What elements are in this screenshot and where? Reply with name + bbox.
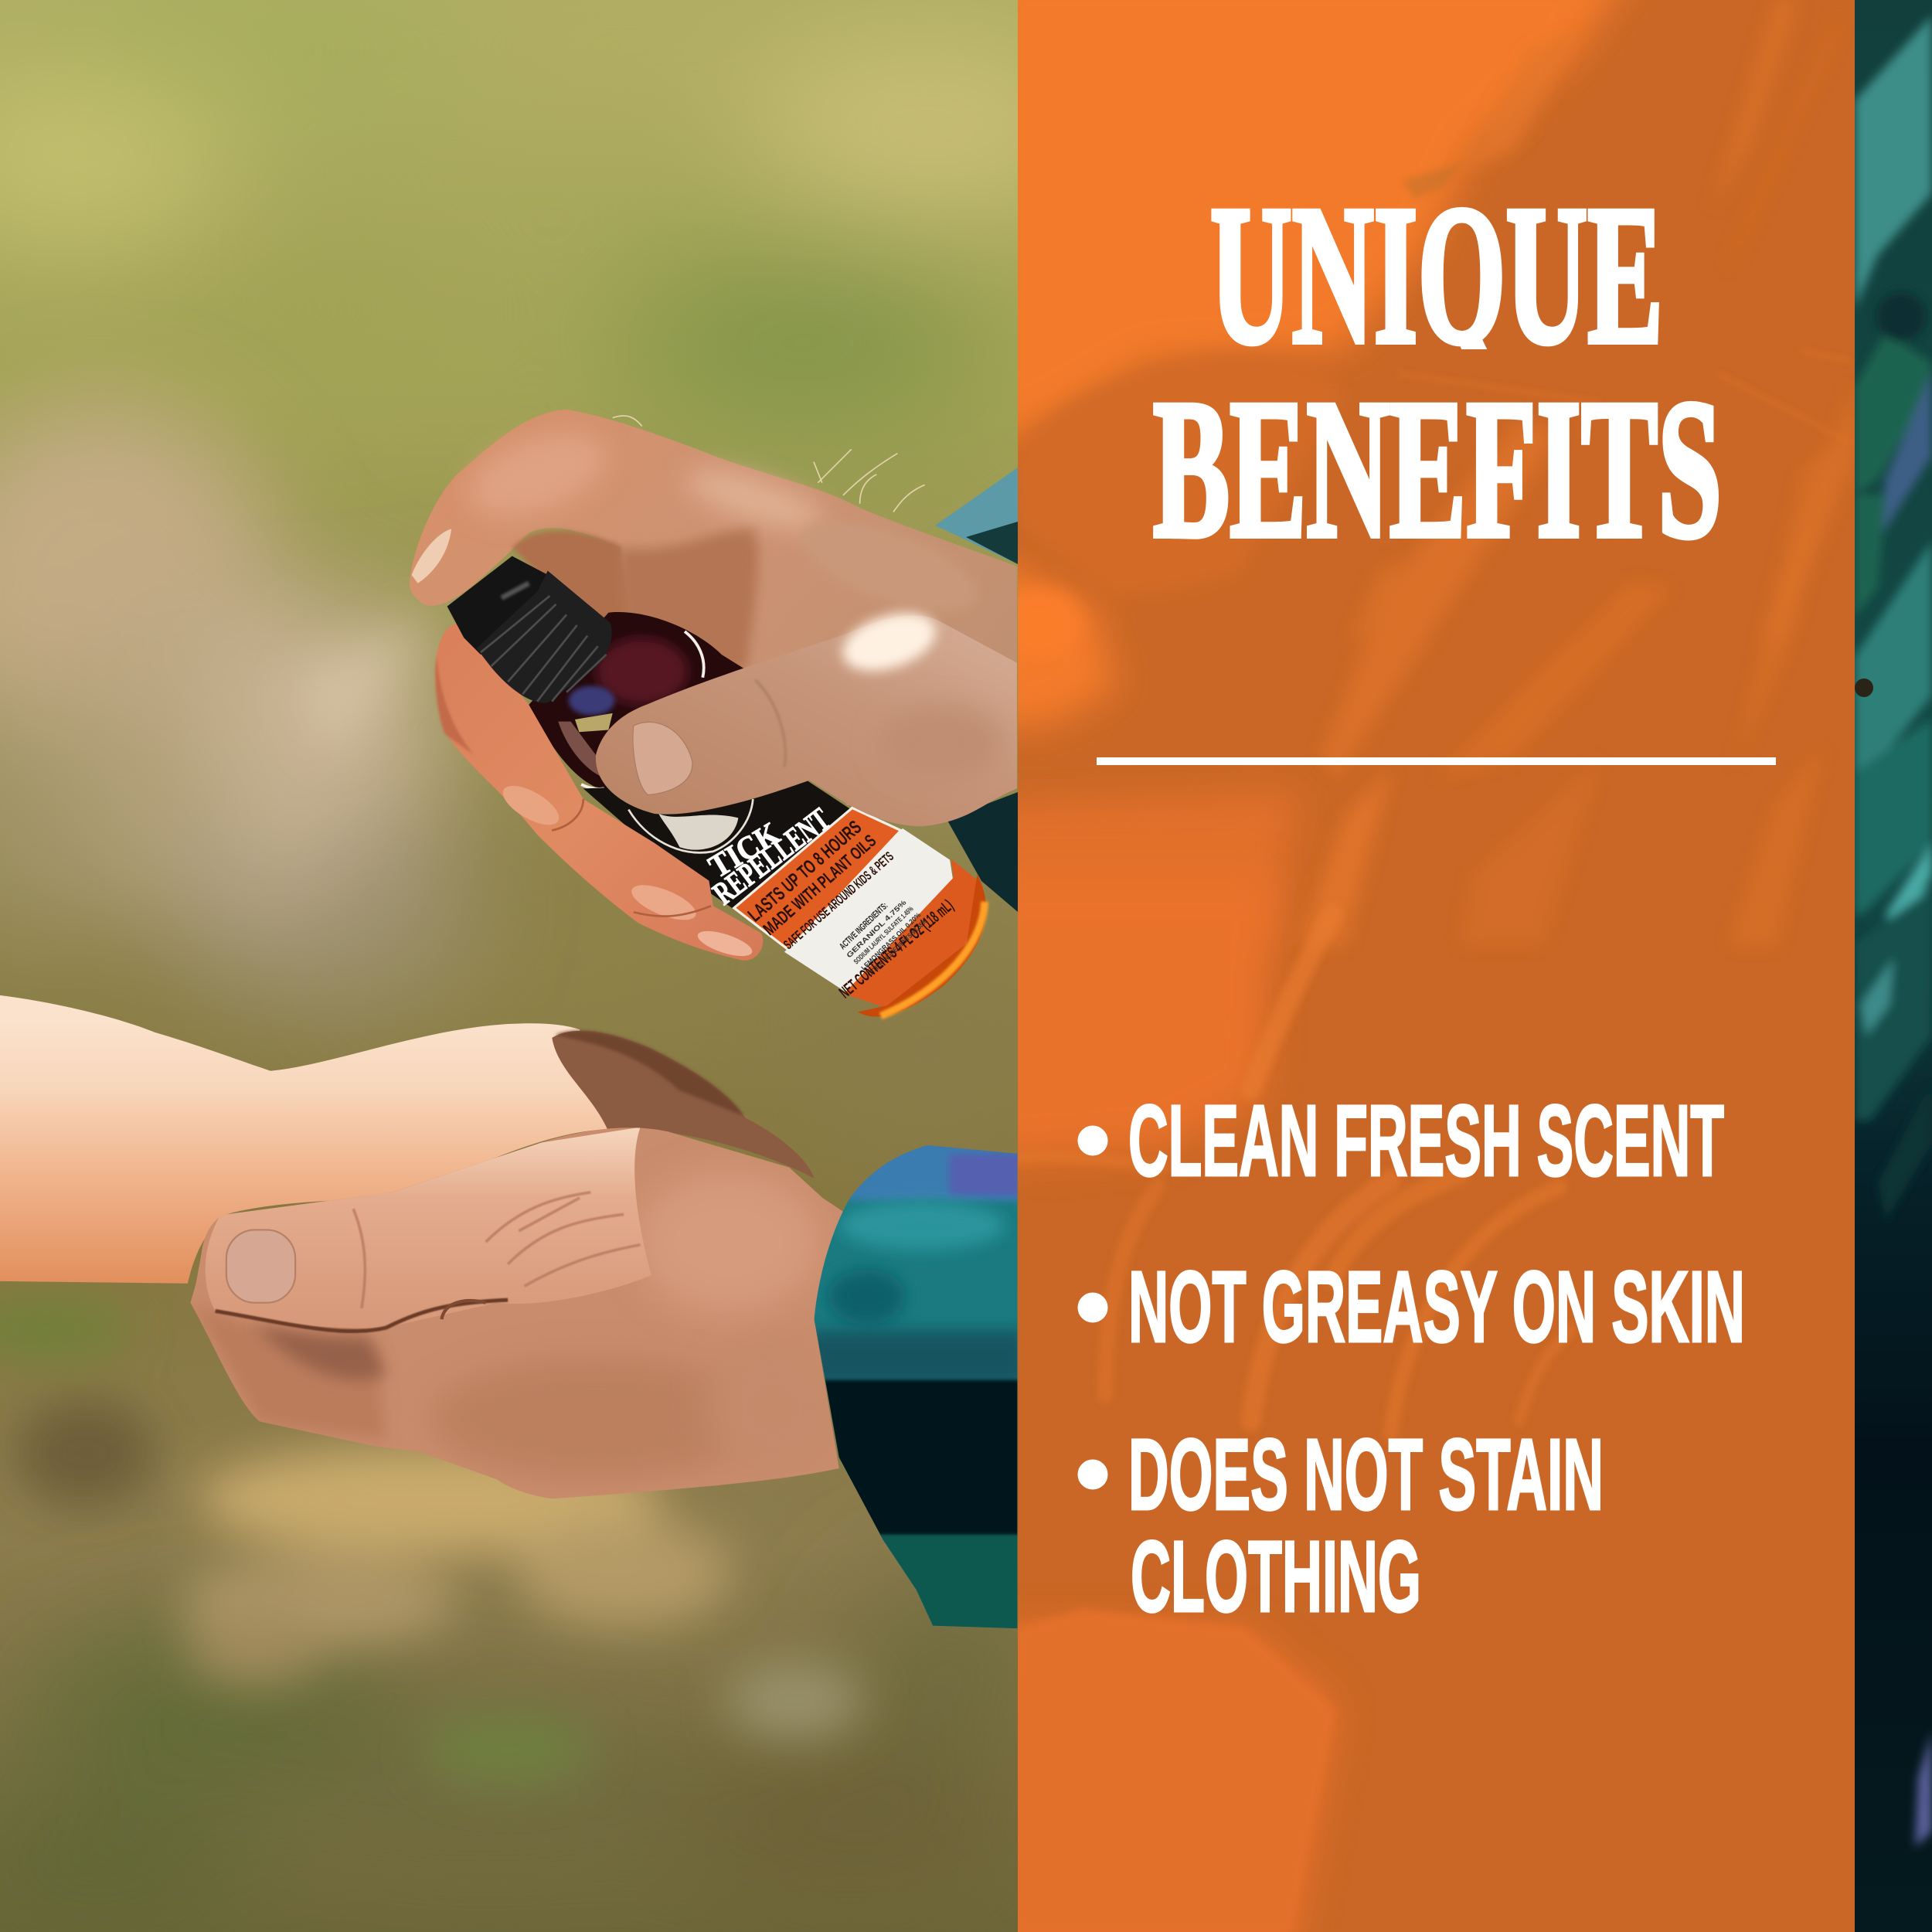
shirt folds	[1485, 56, 1541, 158]
spray mist cloud	[0, 402, 479, 1020]
fingertips	[497, 778, 565, 832]
label lower orange band	[844, 859, 978, 1007]
bullet: does not stain clothing: CLOTHING	[1131, 1519, 1421, 1633]
thumbnail	[633, 722, 692, 795]
panel: orange overlay with shirt texture	[983, 0, 1855, 1932]
bottle label	[583, 779, 986, 1017]
divider line	[1097, 757, 1776, 765]
photo: lower adult hand and child's arm	[0, 995, 1027, 1639]
spray cap	[447, 556, 612, 703]
bottle label: ACTIVE INGREDIENTS:	[837, 900, 889, 951]
amber liquid base	[858, 875, 986, 1017]
lower overlay	[983, 876, 1572, 1932]
panel: photo background	[0, 0, 1105, 1932]
lit thumb and knuckles	[206, 1128, 651, 1328]
photo: upper plaid sleeve	[935, 468, 1018, 912]
thumbnail	[226, 1230, 295, 1303]
bottle label: GERANIOL 4.75%	[845, 899, 908, 959]
index fingernail	[412, 529, 451, 583]
bottle label: NET CONTENTS 4 FL OZ (118 mL)	[835, 896, 957, 1002]
label medallion	[628, 799, 753, 852]
bottle label: LEMONGRASS OIL 0.20%	[859, 911, 922, 972]
palm and curled fingers	[435, 623, 763, 961]
bottle glass	[529, 612, 755, 791]
label text: REPELLENT	[706, 801, 837, 912]
adult hand	[188, 1128, 847, 1498]
bottle label: SAFE FOR USE AROUND KIDS & PETS	[781, 849, 896, 952]
spray jet	[294, 611, 440, 757]
label text	[702, 801, 837, 912]
photo: spray hand and bottle	[410, 410, 1017, 1017]
bottle label: MADE WITH PLANT OILS	[759, 830, 879, 939]
label white ingredients band	[784, 828, 953, 993]
bullet: does not stain clothing	[1079, 1417, 1604, 1633]
bullet: clean fresh scent	[1079, 1083, 1724, 1197]
bottle label: SODIUM LAURYL SULFATE 1.45%	[852, 905, 915, 966]
benefits list	[1079, 1083, 1745, 1633]
label black band	[583, 779, 852, 908]
thumb	[596, 602, 1017, 826]
arm hairs	[613, 416, 925, 512]
heading: unique benefits	[1153, 165, 1722, 579]
label text: TICK	[702, 815, 786, 886]
bottle label: LASTS UP TO 8 HOURS	[744, 816, 866, 926]
label orange band	[734, 808, 901, 950]
bottle label: OTHER INGREDIENTS 93.55%	[866, 917, 929, 978]
plaid cuff	[815, 1145, 1017, 1629]
hand shading	[512, 531, 638, 655]
child's shaded hand	[552, 1031, 815, 1179]
upper overlay	[983, 0, 1855, 944]
panel: right plaid shirt strip	[1855, 0, 1932, 1932]
child's arm	[0, 995, 613, 1284]
hand back and index finger	[410, 410, 1017, 805]
